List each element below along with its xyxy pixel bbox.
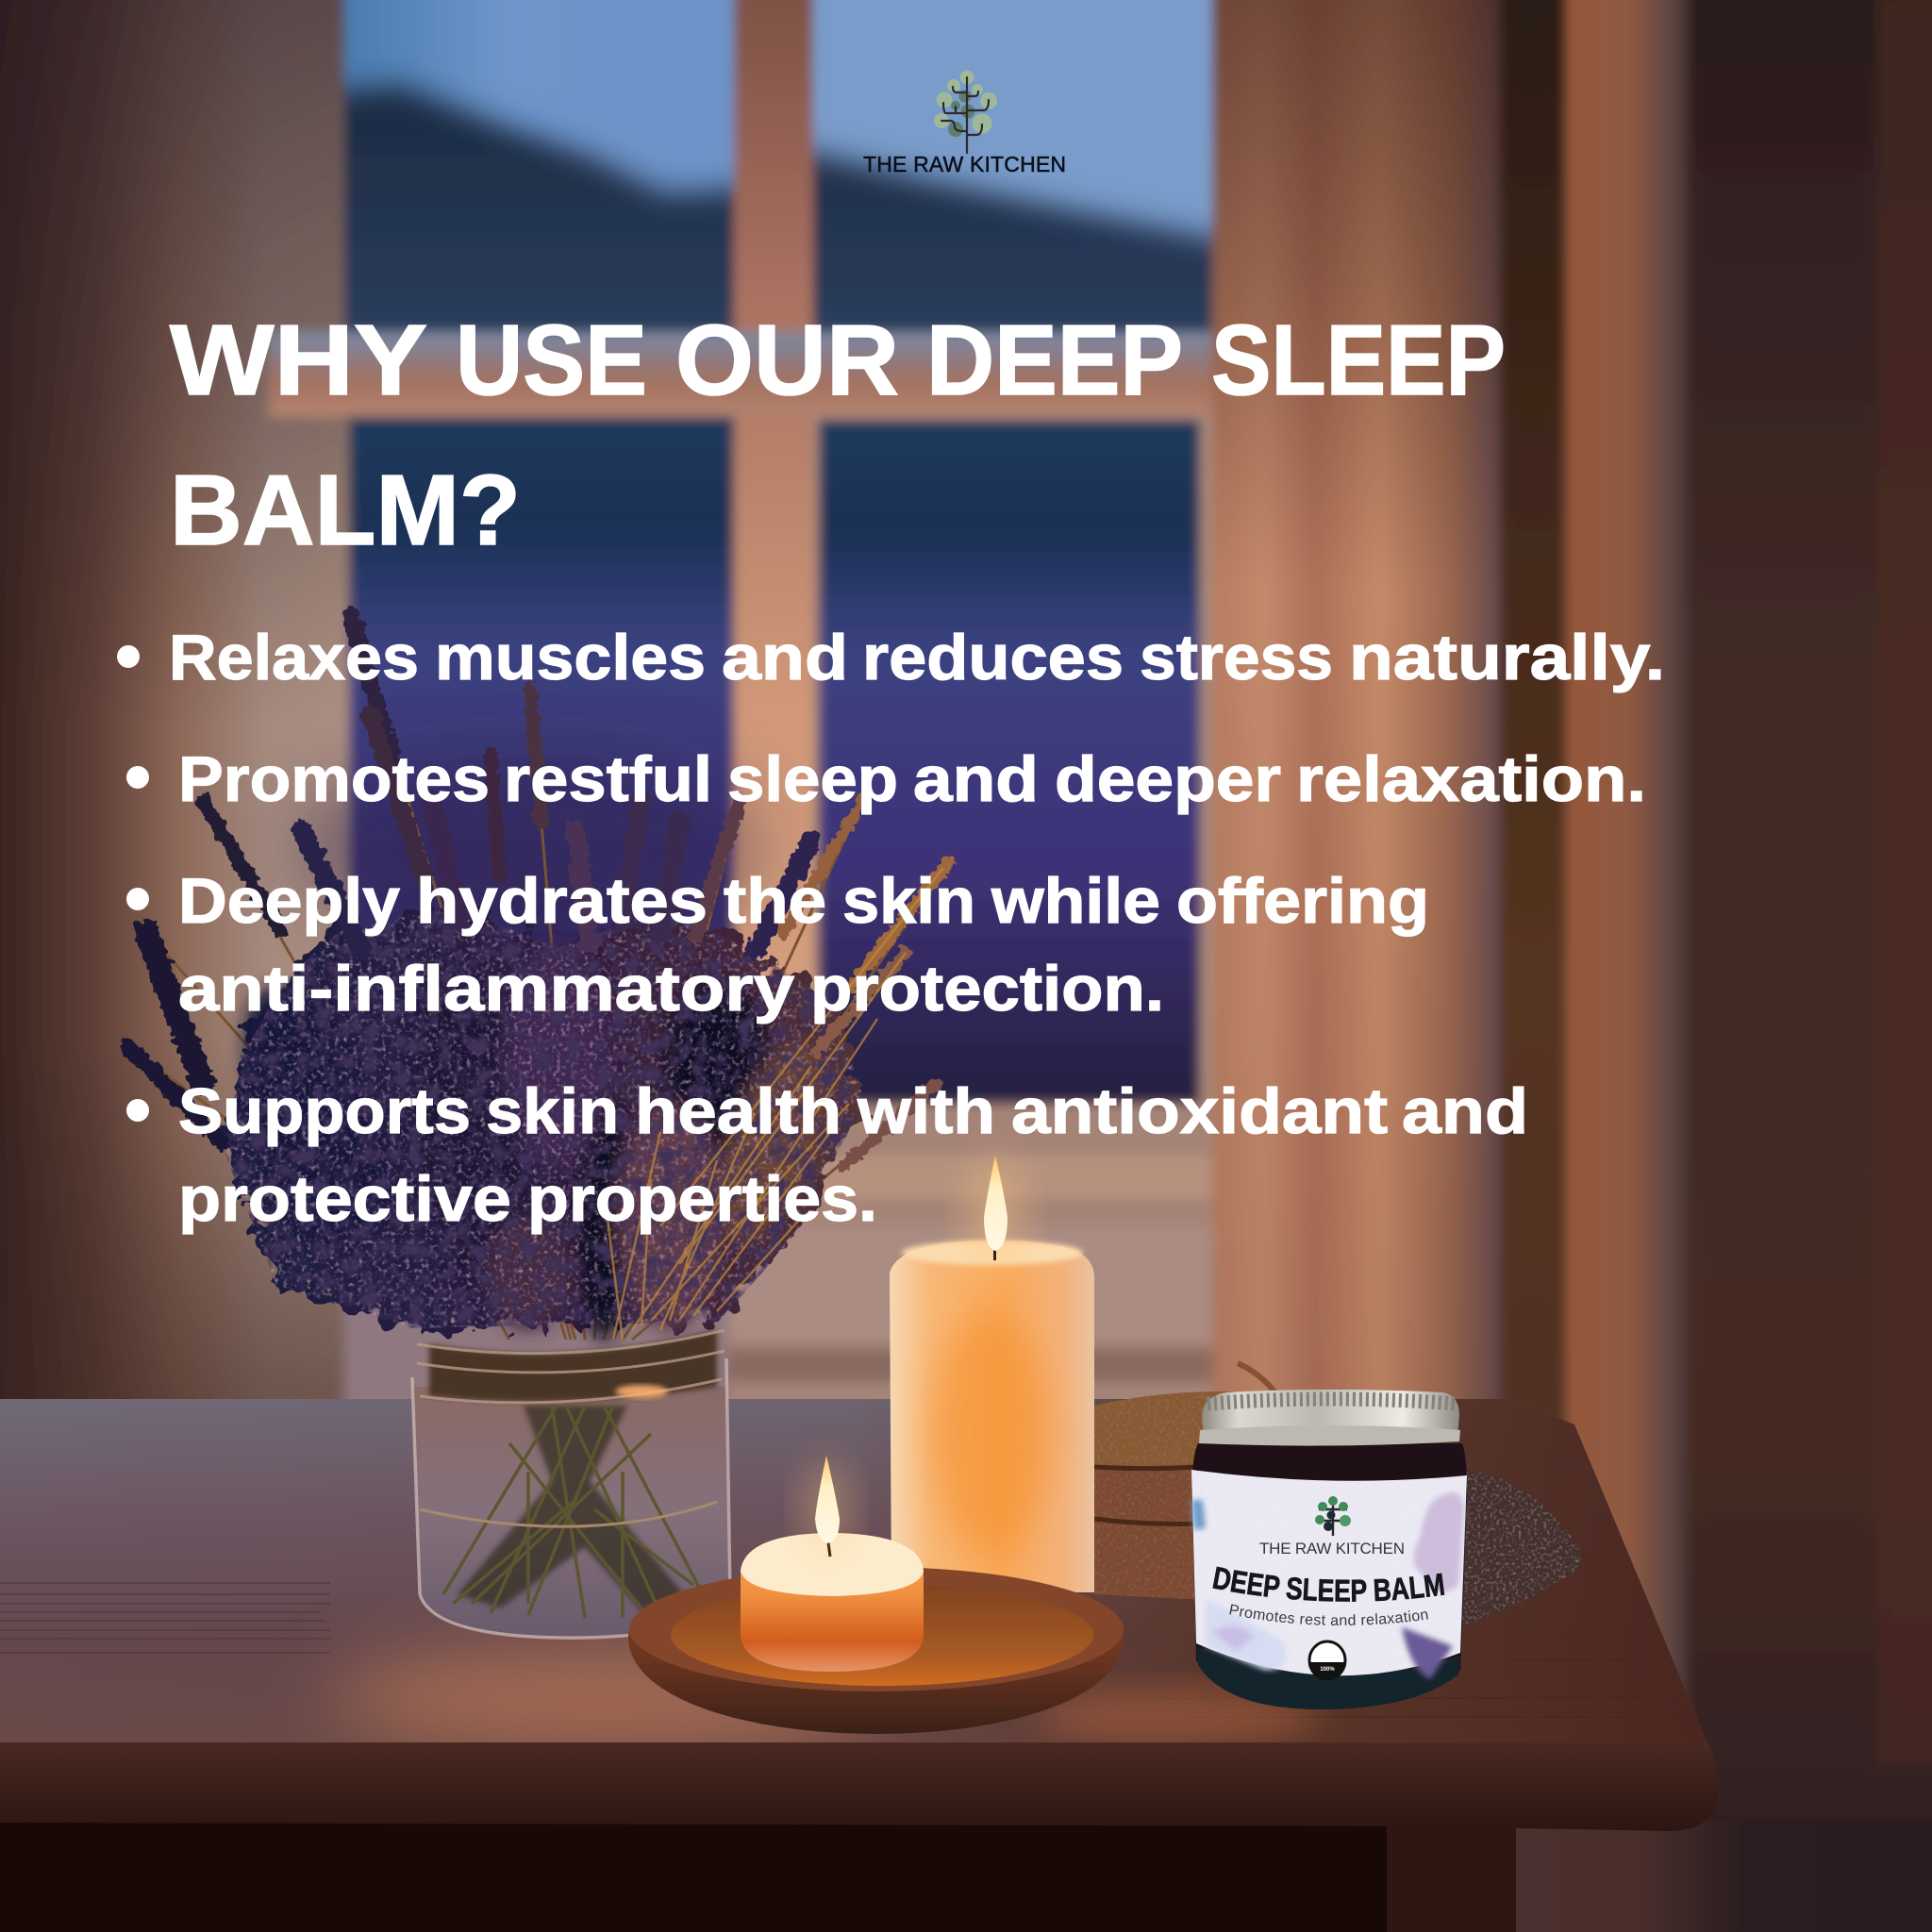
wooden tray xyxy=(628,1567,1124,1734)
table leg xyxy=(1387,1821,1516,1932)
bullet 4: skin xyxy=(486,1075,619,1147)
benefits list xyxy=(117,622,1665,1235)
title: USE xyxy=(456,305,647,416)
logo: The Raw Kitchen xyxy=(863,70,1066,176)
label tagline: Promotes rest and relaxation xyxy=(1229,1604,1428,1626)
vase outline highlight xyxy=(412,1358,730,1638)
bullet 1: and xyxy=(722,622,848,693)
logo tree foliage xyxy=(934,70,997,134)
candle cream top xyxy=(741,1533,924,1596)
dark shadows in mass xyxy=(224,906,864,1328)
bullet 1 xyxy=(117,622,1665,693)
bullet 3: the xyxy=(724,865,826,937)
bullet 1: naturally. xyxy=(1349,622,1665,693)
stem bundle in vase xyxy=(458,1406,684,1611)
bullet 2: Promotes xyxy=(178,743,490,815)
orange towel stack xyxy=(1094,1391,1245,1602)
bullet 2: sleep xyxy=(727,743,898,815)
bullet 3: offering xyxy=(1176,865,1429,937)
twine on stems xyxy=(420,1502,717,1526)
window lower left pane xyxy=(349,415,734,1099)
dark far right wall xyxy=(1689,0,1932,1932)
watercolour clouds xyxy=(1191,1492,1464,1679)
paper texture xyxy=(1191,1470,1467,1675)
bullet 2: deeper xyxy=(1055,743,1281,815)
bullet 1: muscles xyxy=(435,622,706,693)
stems xyxy=(129,616,948,1340)
window upper right pane xyxy=(808,0,1219,340)
bullet 1: stress xyxy=(1140,622,1333,693)
bullet 2 xyxy=(126,743,1646,815)
title: WHY xyxy=(170,305,427,416)
title: DEEP xyxy=(926,305,1183,416)
flower texture xyxy=(224,906,864,1328)
candle body xyxy=(741,1533,924,1672)
tray body xyxy=(628,1569,1124,1734)
dark towel xyxy=(1415,1462,1582,1626)
candle inner glow xyxy=(932,1311,1049,1557)
bullet 1: reduces xyxy=(862,622,1124,693)
label product name: DEEP SLEEP BALM xyxy=(1212,1566,1445,1602)
title: OUR xyxy=(675,305,899,416)
vase with lavender stems xyxy=(412,1330,730,1638)
lid skirt xyxy=(1199,1425,1460,1446)
curtain shadow band xyxy=(1500,0,1568,1932)
logo tree branches xyxy=(941,77,989,153)
bullet 2: restful xyxy=(504,743,712,815)
jar glass xyxy=(1192,1443,1467,1709)
dark neck contents xyxy=(429,1330,717,1402)
bullet 3: Deeply xyxy=(178,865,400,937)
bullet 3 xyxy=(126,865,1429,1024)
wick xyxy=(993,1243,996,1260)
bullet 4: health xyxy=(635,1075,841,1147)
logo tree dark foliage xyxy=(948,91,975,137)
mauve lower wall behind vase xyxy=(344,1099,741,1420)
bullet 4 xyxy=(126,1075,1528,1235)
area below table on right xyxy=(1509,1821,1932,1932)
towels xyxy=(1094,1363,1582,1626)
blurred purple halo behind sprigs xyxy=(302,755,755,943)
bullet 2: relaxation. xyxy=(1296,743,1646,815)
table top surface xyxy=(0,1399,1708,1745)
bullet 4: Supports xyxy=(178,1075,471,1147)
label badge xyxy=(1309,1641,1345,1680)
bullet 4: antioxidant xyxy=(1011,1075,1388,1147)
right curtain xyxy=(1566,0,1693,1932)
vase rim xyxy=(417,1330,724,1403)
lavender spikes xyxy=(129,616,948,1170)
distant hills xyxy=(335,66,1223,340)
flame glow xyxy=(963,1158,1027,1275)
product jar: Deep Sleep Balm xyxy=(1188,1390,1468,1709)
window horizontal mullion xyxy=(269,332,1217,417)
jar label xyxy=(1191,1470,1467,1675)
bullet 4: protective xyxy=(178,1163,511,1235)
bullet 3: hydrates xyxy=(416,865,708,937)
candle body xyxy=(890,1240,1094,1592)
bullet 4: and xyxy=(1402,1075,1528,1147)
label brand: THE RAW KITCHEN xyxy=(1259,1540,1405,1557)
bullet 3: anti-inflammatory xyxy=(178,953,794,1024)
table right shading xyxy=(0,1399,1708,1745)
jar base tint xyxy=(1196,1646,1460,1709)
tray rim top xyxy=(629,1567,1124,1691)
table front edge xyxy=(0,1742,1719,1831)
title: BALM? xyxy=(170,455,521,566)
bullet 3: skin xyxy=(842,865,975,937)
flame xyxy=(984,1156,1008,1251)
large candle xyxy=(890,1156,1094,1592)
bullet 2: and xyxy=(913,743,1039,815)
warm straw highlights xyxy=(604,868,943,1340)
bullet 4: properties. xyxy=(527,1163,877,1235)
bullet 1: Relaxes xyxy=(169,622,419,693)
window vertical mullion xyxy=(734,0,813,1198)
window upper left pane xyxy=(344,0,741,335)
table xyxy=(0,1399,1932,1932)
window sill and lower wall xyxy=(728,1104,1219,1415)
lavender bouquet xyxy=(129,616,948,1340)
label badge: 100% xyxy=(1320,1667,1335,1673)
title xyxy=(170,305,1506,566)
light curtain right of window xyxy=(1212,0,1500,1443)
flower plumes xyxy=(217,943,849,1340)
tray inner xyxy=(671,1584,1093,1686)
lid ridges xyxy=(1208,1399,1456,1404)
warm reflection on table xyxy=(330,1646,877,1750)
bullet 3: protection. xyxy=(810,953,1164,1024)
bullet 3: while xyxy=(991,865,1160,937)
wick xyxy=(827,1536,830,1557)
stems in vase xyxy=(443,1406,703,1618)
vase glass xyxy=(412,1387,730,1638)
logo wordmark: THE RAW KITCHEN xyxy=(863,152,1066,176)
candle top melt xyxy=(902,1241,1083,1265)
jar lid xyxy=(1202,1390,1459,1439)
flame glow xyxy=(800,1462,853,1557)
window lower right pane xyxy=(819,420,1200,1104)
small candle xyxy=(741,1456,924,1672)
twine xyxy=(1238,1363,1279,1398)
drawer xyxy=(0,1816,1389,1932)
wood grain xyxy=(0,1583,1689,1717)
label logo xyxy=(1315,1496,1351,1536)
flame xyxy=(815,1456,840,1543)
glass glow xyxy=(615,1385,668,1398)
flower mass xyxy=(224,906,864,1328)
bullet 4: with xyxy=(857,1075,995,1147)
title: SLEEP xyxy=(1211,305,1506,416)
